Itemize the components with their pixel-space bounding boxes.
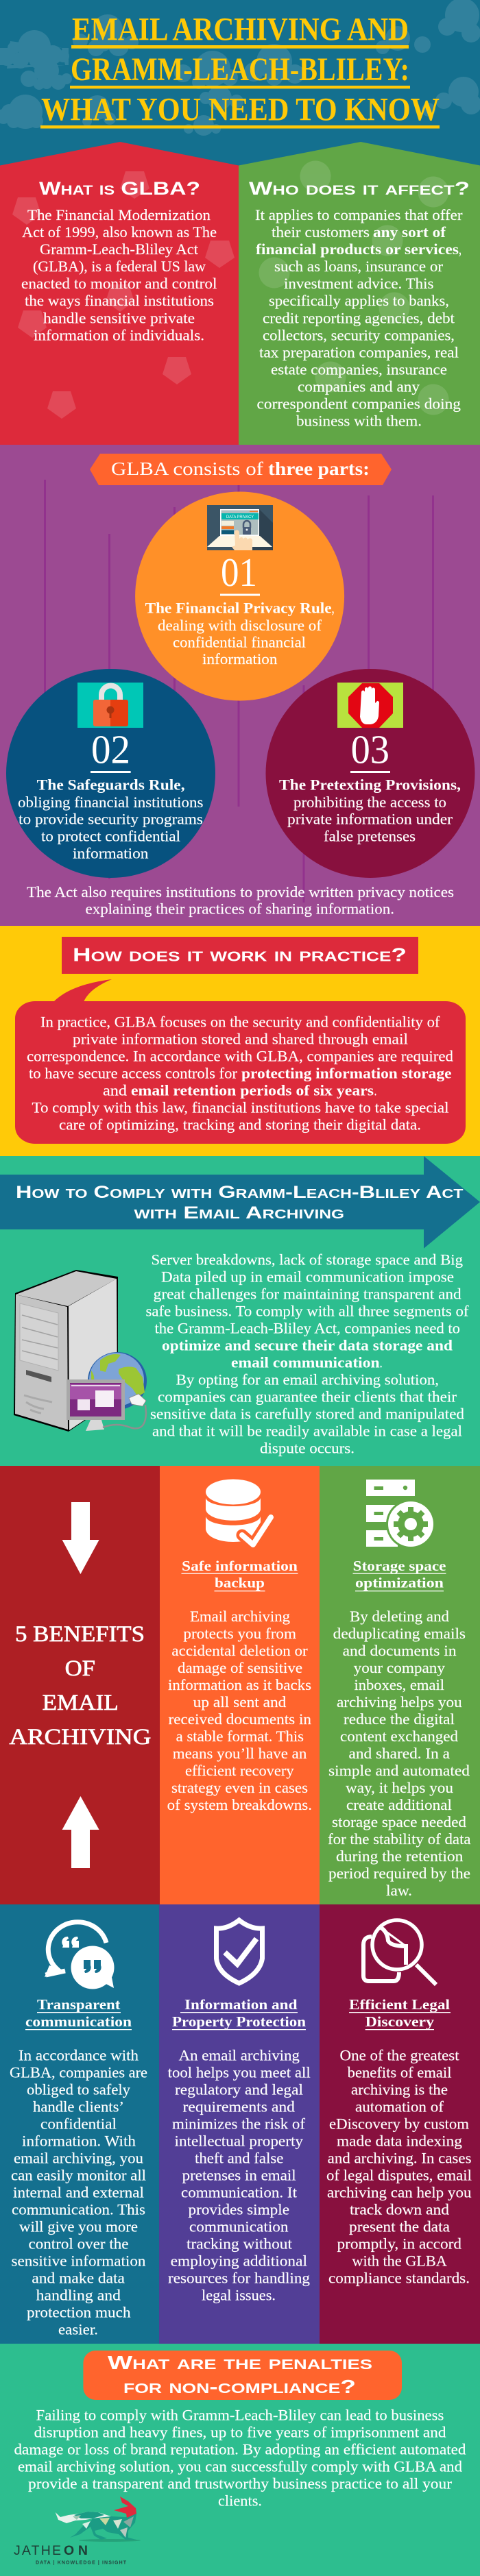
text: discovery body: eDiscovery by custom <box>329 2115 469 2133</box>
text: storage body: and documents in <box>343 1642 457 1659</box>
text: penalties body: email archiving solution, you can successfully comply with GLBA and <box>18 2458 462 2475</box>
text: who is affected: It applies to companies that offer <box>255 206 463 223</box>
text: communication body: control over the <box>29 2235 129 2253</box>
text: who is affected: investment advice. This <box>284 275 433 292</box>
text: protection body <box>168 2047 311 2304</box>
text: communication body <box>10 2047 147 2338</box>
text: storage body: law. <box>386 1882 412 1899</box>
text: safeguards rule: obliging financial institutions <box>18 794 203 811</box>
text: penalties body: clients. <box>218 2492 262 2510</box>
heading: efficient legal discovery: Discovery <box>365 2013 435 2030</box>
text: how to comply: Data piled up in email communication impose <box>161 1268 454 1286</box>
text: GLBA definition: the ways financial institutions <box>25 292 214 309</box>
text: practice explanation <box>27 1013 453 1133</box>
circle: safeguards rule <box>6 669 215 878</box>
text: backup body: damage of sensitive <box>178 1659 302 1676</box>
heading: transparent communication <box>25 1996 132 2030</box>
banner: GLBA consists of three parts: GLBA consists of <box>111 458 263 479</box>
text: GLBA definition: The Financial Modernization <box>27 206 211 223</box>
text: communication body: easier. <box>58 2321 98 2338</box>
title: GRAMM-LEACH-BLILEY: <box>71 51 409 88</box>
text: discovery body: archiving can help you <box>327 2184 472 2201</box>
circle: financial privacy rule <box>135 492 344 700</box>
text: who is affected <box>255 206 463 429</box>
text: protection body: resources for handling <box>168 2270 310 2287</box>
text: discovery body: archiving is the <box>351 2081 448 2098</box>
text: storage body: for the stability of data <box>328 1830 471 1848</box>
text: financial privacy rule: information <box>202 650 277 667</box>
text: penalties body: disruption and heavy fines, up to five years of imprisonment and <box>34 2424 446 2441</box>
text: how to comply: safe business. To comply with all three segments of <box>145 1303 469 1320</box>
heading: 5 benefits of email archiving: 5 BENEFITS <box>15 1622 145 1647</box>
text: backup body: protects you from <box>183 1625 296 1642</box>
text: protection body: minimizes the risk of <box>172 2115 306 2133</box>
text: practice explanation: private information stored and shared through email <box>73 1030 408 1047</box>
header background with clouds <box>0 0 480 178</box>
text: discovery body <box>326 2047 472 2287</box>
text: GLBA definition: Gramm-Leach-Bliley Act <box>40 241 198 258</box>
text: privacy notices: explaining their practices of sharing information. <box>85 900 394 917</box>
text: privacy notices: The Act also requires institutions to provide written privacy notices <box>27 883 454 900</box>
text: communication body: can easily monitor all <box>11 2167 146 2184</box>
panel: 5 benefits title column <box>0 1466 160 1904</box>
text: discovery body: promptly, in accord <box>337 2235 461 2253</box>
panel: how does it work in practice <box>0 926 480 1156</box>
heading: storage space optimization <box>352 1558 446 1591</box>
text: pretexting provisions: The Pretexting Provisions, <box>279 776 461 794</box>
banner: GLBA consists of three parts <box>90 454 392 485</box>
title <box>40 11 440 129</box>
text: how to comply: great challenges for maintaining transparent and <box>154 1286 461 1303</box>
text: protection body: tool helps you meet all <box>168 2064 311 2081</box>
number 03: 03 <box>351 727 389 772</box>
text: GLBA definition: (GLBA), is a federal US law <box>33 258 206 275</box>
text: how to comply: email communication <box>231 1354 380 1371</box>
text: who is affected: such as loans, insurance or <box>274 258 444 275</box>
heading: storage space optimization: optimization <box>355 1575 444 1591</box>
text: storage body: storage space needed <box>332 1813 466 1830</box>
text: discovery body: made data indexing <box>337 2133 462 2150</box>
icon: data privacy laptop: DATA PRIVACY <box>226 515 254 519</box>
text: communication body: obliged to safely <box>27 2081 130 2098</box>
text: GLBA definition <box>21 206 217 344</box>
text: backup body: Email archiving <box>190 1608 290 1625</box>
icon: padlock <box>77 683 143 728</box>
text: storage body: inboxes, email <box>354 1676 444 1693</box>
text: discovery body: One of the greatest <box>340 2047 459 2064</box>
icon: document under magnifier <box>363 1920 436 1985</box>
text: practice explanation: care of optimizing, tracking and storing their digital data. <box>59 1116 421 1133</box>
text: storage body: reduce the digital <box>344 1710 455 1728</box>
logo: Jatheon <box>14 2497 141 2566</box>
text: practice explanation: To comply with this law, financial institutions have to take special <box>32 1099 448 1116</box>
text: storage body: period required by the <box>328 1865 470 1882</box>
text: how to comply: . <box>380 1354 383 1371</box>
heading: transparent communication: communication <box>25 2013 132 2030</box>
text: communication body: protection much <box>27 2304 131 2321</box>
text: who is affected: specifically applies to banks, <box>269 292 449 309</box>
speech bubble <box>15 979 466 1144</box>
text: backup body: of system breakdowns. <box>167 1796 312 1813</box>
text: how to comply: Server breakdowns, lack of storage space and Big <box>151 1251 463 1268</box>
text: storage body: deduplicating emails <box>333 1625 466 1642</box>
text: who is affected: correspondent companies doing <box>256 395 461 412</box>
text: penalties body <box>14 2407 466 2510</box>
heading: 5 benefits of email archiving <box>9 1622 151 1750</box>
text: backup body: means you’ll have an <box>173 1745 307 1762</box>
text: pretexting provisions <box>279 776 461 844</box>
text: safeguards rule: The Safeguards Rule, <box>37 776 185 794</box>
text: backup body: a stable format. This <box>176 1728 304 1745</box>
text: protection body: provides simple <box>188 2201 289 2218</box>
text: financial privacy rule: dealing with disclosure of <box>158 617 322 634</box>
text: communication body: handling and <box>36 2287 121 2304</box>
icon: data privacy laptop <box>207 505 273 550</box>
text: backup body: information as it backs <box>168 1676 311 1693</box>
text: pretexting provisions: prohibiting the access to <box>293 794 446 811</box>
text: storage body <box>328 1608 471 1899</box>
text: protection body: theft and false <box>195 2150 283 2167</box>
heading: penalties <box>83 2351 402 2400</box>
text: protection body: communication. It <box>181 2184 297 2201</box>
text: communication body: sensitive information <box>11 2253 145 2270</box>
icon: database with check <box>206 1479 271 1545</box>
text: communication body: confidential <box>40 2115 117 2133</box>
arrow: down <box>62 1502 99 1574</box>
title: WHAT YOU NEED TO KNOW <box>41 92 440 128</box>
text: protection body: An email archiving <box>179 2047 300 2064</box>
text: practice explanation: In practice, GLBA focuses on the security and confidentiality of <box>40 1013 440 1030</box>
heading: 5 benefits of email archiving: ARCHIVING <box>9 1725 151 1750</box>
arrow: up <box>62 1796 99 1868</box>
logo: Jatheon: DATA | KNOWLEDGE | INSIGHT <box>36 2561 127 2566</box>
text: penalties body: damage or loss of brand reputation. By adopting an efficient automated <box>14 2441 466 2458</box>
text: storage body: simple and automated <box>328 1762 470 1779</box>
text: practice explanation: and <box>103 1081 127 1099</box>
text: discovery body: automation of <box>355 2098 444 2115</box>
text: storage body: archiving helps you <box>337 1693 462 1710</box>
text: practice explanation: email retention periods of six years <box>131 1081 374 1099</box>
heading: safe information backup: backup <box>215 1575 265 1591</box>
text: protection body: tracking without <box>187 2235 292 2253</box>
heading: information and property protection <box>172 1996 306 2030</box>
text: GLBA definition: Act of 1999, also known as The <box>22 223 217 241</box>
text: GLBA definition: handle sensitive private <box>43 309 195 326</box>
heading: safe information backup <box>181 1558 298 1591</box>
text: financial privacy rule: , <box>332 600 335 617</box>
text: practice explanation: correspondence. In accordance with GLBA, companies are required <box>27 1047 453 1064</box>
text: financial privacy rule: confidential financial <box>173 633 306 651</box>
text: who is affected: any sort of <box>373 223 446 241</box>
text: how to comply: By opting for an email archiving solution, <box>176 1371 439 1388</box>
text: how to comply <box>145 1251 469 1457</box>
heading: penalties: for non-compliance? <box>123 2376 356 2397</box>
text: storage body: By deleting and <box>350 1608 449 1625</box>
text: backup body: efficient recovery <box>185 1762 294 1779</box>
panel: efficient legal discovery <box>320 1904 480 2344</box>
text: protection body: communication <box>189 2218 288 2235</box>
text: storage body: create additional <box>346 1796 452 1813</box>
icon: shield with check <box>217 1920 262 1983</box>
text: discovery body: track down and <box>350 2201 449 2218</box>
text: how to comply: the Gramm-Leach-Bliley Act, companies need to <box>155 1320 460 1337</box>
text: discovery body: present the data <box>349 2218 450 2235</box>
text: communication body: internal and external <box>13 2184 144 2201</box>
heading: what is GLBA: What is GLBA? <box>39 178 200 199</box>
heading: information and property protection: Information and <box>184 1996 298 2013</box>
logo: Jatheon: JATHE <box>14 2543 61 2558</box>
text: backup body <box>167 1608 312 1813</box>
text: who is affected: companies and any <box>298 378 420 395</box>
text: protection body: regulatory and legal <box>175 2081 303 2098</box>
text: how to comply: dispute occurs. <box>260 1440 355 1457</box>
text: how to comply: optimize and secure their data storage and <box>162 1337 453 1354</box>
text: communication body: will give you more <box>19 2218 138 2235</box>
text: storage body: during the retention <box>336 1848 463 1865</box>
text: backup body: received documents in <box>169 1710 311 1728</box>
heading: efficient legal discovery <box>349 1996 451 2030</box>
text: who is affected: credit reporting agencies, debt <box>263 309 455 326</box>
heading: 5 benefits of email archiving: EMAIL <box>43 1691 119 1715</box>
panel: who does it affect <box>239 142 480 445</box>
text: who is affected: their customers <box>272 223 370 241</box>
text: communication body: information. With <box>22 2133 136 2150</box>
panel: storage space optimization <box>320 1466 480 1904</box>
arrow heading: with Email Archiving <box>134 1203 344 1223</box>
text: practice explanation: protecting information storage <box>241 1064 452 1081</box>
panel: transparent communication <box>0 1904 159 2344</box>
heading: efficient legal discovery: Efficient Legal <box>349 1996 450 2013</box>
heading: storage space optimization: Storage space <box>353 1558 446 1574</box>
banner: GLBA consists of three parts: three parts: <box>268 458 370 479</box>
text: storage body: and shared. In a <box>348 1745 450 1762</box>
text: penalties body: Failing to comply with Gramm-Leach-Bliley can lead to business <box>36 2407 444 2424</box>
text: pretexting provisions: private information under <box>287 811 453 828</box>
arrow heading <box>0 1156 480 1249</box>
number 01: 01 <box>221 550 257 595</box>
text: communication body: In accordance with <box>19 2047 139 2064</box>
icon: server with globe and monitor <box>14 1270 147 1432</box>
icon: storage with gear <box>366 1480 435 1549</box>
text: how to comply: companies can guarantee their clients that their <box>158 1388 457 1406</box>
number 02: 02 <box>91 727 130 772</box>
panel: three parts of GLBA <box>0 445 480 926</box>
title: EMAIL ARCHIVING AND <box>72 11 409 48</box>
text: practice explanation: . <box>374 1081 377 1099</box>
text: financial privacy rule: The Financial Privacy Rule <box>145 600 332 617</box>
heading: 5 benefits of email archiving: OF <box>65 1656 95 1681</box>
text: discovery body: compliance standards. <box>328 2270 470 2287</box>
heading: transparent communication: Transparent <box>37 1996 120 2013</box>
icon: stop hand <box>337 683 403 728</box>
text: storage body: your company <box>354 1659 445 1676</box>
text: discovery body: with the GLBA <box>352 2253 447 2270</box>
text: who is affected: business with them. <box>296 412 422 429</box>
panel: safe information backup <box>160 1466 320 1904</box>
text: safeguards rule: information <box>73 844 148 861</box>
panel: how to comply <box>0 1156 480 1466</box>
text: who is affected: tax preparation companies, real <box>259 344 459 361</box>
text: penalties body: provide a transparent and trustworthy business practice to all your <box>28 2475 453 2492</box>
heading: who does it affect: Who does it affect? <box>249 178 470 199</box>
text: who is affected: estate companies, insurance <box>271 360 447 378</box>
text: protection body: legal issues. <box>202 2287 276 2304</box>
panel: penalties <box>0 2344 480 2576</box>
text: safeguards rule <box>18 776 203 861</box>
logo: Jatheon: ON <box>64 2543 88 2558</box>
text: communication body: email archiving, you <box>14 2150 143 2167</box>
heading: penalties: What are the penalties <box>108 2352 372 2373</box>
text: who is affected: collectors, security companies, <box>263 326 455 344</box>
text: discovery body: and archiving. In cases <box>328 2150 472 2167</box>
text: privacy notices <box>27 883 454 917</box>
text: communication body: handle clients’ <box>33 2098 124 2115</box>
text: communication body: and make data <box>32 2270 125 2287</box>
text: pretexting provisions: false pretenses <box>324 827 416 844</box>
heading: safe information backup: Safe information <box>182 1558 298 1574</box>
text: communication body: GLBA, companies are <box>10 2064 147 2081</box>
text: how to comply: and that it will be readily available in case a legal <box>152 1423 462 1440</box>
circle: pretexting provisions <box>266 669 475 878</box>
heading banner: how does it work <box>62 937 418 974</box>
heading banner: how does it work: How does it work in practice? <box>73 944 407 966</box>
text: who is affected: , <box>459 241 461 258</box>
text: protection body: employing additional <box>171 2253 307 2270</box>
heading: information and property protection: Property Protection <box>172 2013 306 2030</box>
text: protection body: intellectual property <box>174 2133 303 2150</box>
text: discovery body: benefits of email <box>348 2064 451 2081</box>
text: backup body: accidental deletion or <box>171 1642 308 1659</box>
text: communication body: communication. This <box>12 2201 145 2218</box>
text: how to comply: sensitive data is carefully stored and manipulated <box>150 1406 464 1423</box>
arrow heading: How to Comply with Gramm-Leach-Bliley Act <box>16 1183 464 1202</box>
panel: information and property protection <box>159 1904 320 2344</box>
text: backup body: up all sent and <box>193 1693 286 1710</box>
text: backup body: strategy even in cases <box>171 1779 308 1796</box>
icon: chat bubbles <box>45 1922 114 1989</box>
text: storage body: way, it helps you <box>346 1779 453 1796</box>
text: safeguards rule: to provide security programs <box>19 811 203 828</box>
text: protection body: pretenses in email <box>182 2167 296 2184</box>
panel: what is GLBA <box>0 142 239 445</box>
text: who is affected: financial products or services <box>256 241 459 258</box>
text: protection body: requirements and <box>182 2098 295 2115</box>
text: GLBA definition: enacted to monitor and control <box>21 275 217 292</box>
text: practice explanation: to have secure access controls for <box>29 1064 238 1081</box>
text: GLBA definition: information of individuals. <box>34 326 204 344</box>
text: discovery body: of legal disputes, email <box>326 2167 472 2184</box>
text: storage body: content exchanged <box>340 1728 458 1745</box>
text: financial privacy rule <box>145 600 335 667</box>
text: safeguards rule: to protect confidential <box>41 827 180 844</box>
